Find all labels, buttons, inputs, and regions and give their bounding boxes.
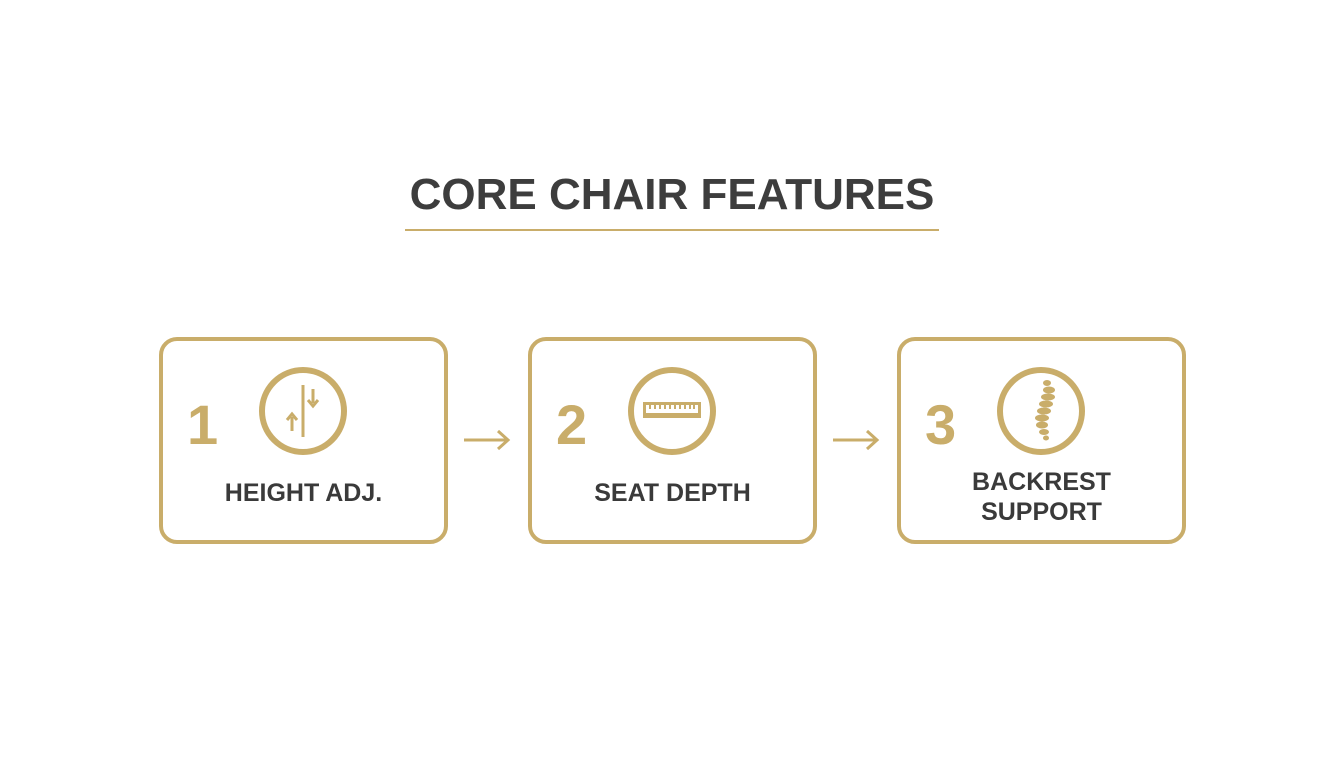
- number 3: 3: [925, 393, 956, 456]
- label: [972, 468, 1111, 526]
- icon: spine: [997, 367, 1085, 455]
- number 1: 1: [187, 393, 218, 456]
- panel: seat depth: [528, 337, 817, 544]
- title underline: [405, 229, 939, 231]
- title: CORE CHAIR FEATURES: [410, 170, 934, 219]
- label: SUPPORT: [981, 498, 1102, 526]
- icon: ruler: [628, 367, 716, 455]
- arrow 2: [833, 430, 880, 450]
- icon: height arrows: [259, 367, 347, 455]
- number 2: 2: [556, 393, 587, 456]
- label: SEAT DEPTH: [594, 479, 751, 507]
- arrow 1: [464, 430, 510, 450]
- label: HEIGHT ADJ.: [225, 479, 382, 507]
- panel: height adjustment: [159, 337, 448, 544]
- panel: backrest support: [897, 337, 1186, 544]
- label: BACKREST: [972, 468, 1111, 496]
